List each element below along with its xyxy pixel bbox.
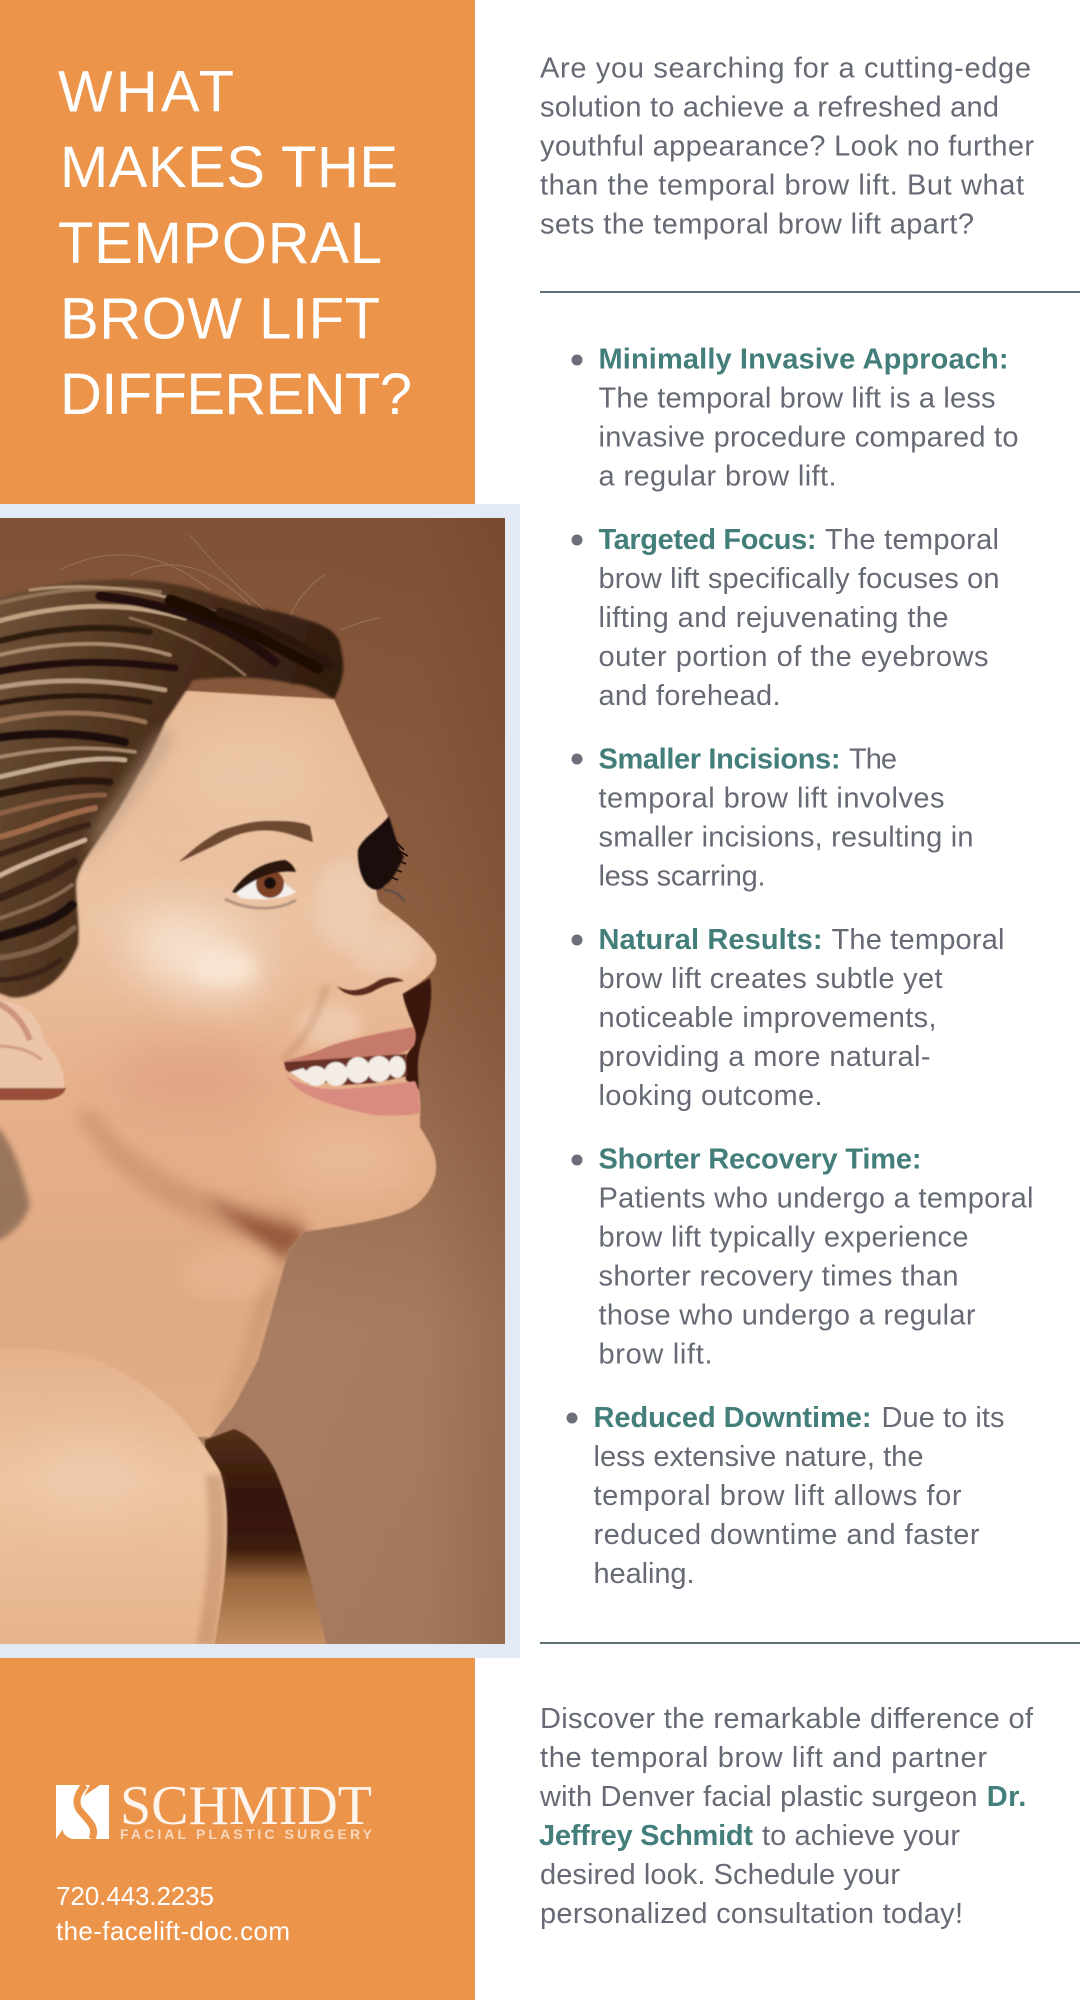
bullet: reduced downtime: temporal brow lift allows for xyxy=(594,1480,962,1512)
bullet: shorter recovery time: shorter recovery times than xyxy=(598,1261,958,1293)
bullet: reduced downtime: healing. xyxy=(594,1558,694,1590)
bullet: minimally invasive approach: a regular brow lift. xyxy=(598,461,836,493)
bullet: shorter recovery time: those who undergo a regular xyxy=(598,1300,976,1332)
panel: footer block xyxy=(0,1658,475,2000)
bullet: minimally invasive approach xyxy=(572,344,1018,493)
contact details xyxy=(56,1881,290,1946)
bullet: minimally invasive approach: Minimally Invasive Approach: xyxy=(598,344,1008,376)
intro paragraph: solution to achieve a refreshed and xyxy=(540,92,999,124)
far cheek shadow xyxy=(403,978,431,1090)
mouth xyxy=(284,1027,420,1116)
bullet: natural results: Natural Results: xyxy=(598,924,822,956)
hair mass xyxy=(0,579,343,998)
closing paragraph xyxy=(539,1703,1034,1930)
title: WHAT xyxy=(58,60,234,124)
bullet: smaller incisions xyxy=(572,744,974,893)
logo: SCHMIDT xyxy=(120,1775,372,1837)
nostril xyxy=(337,977,404,995)
bullet: natural results: looking outcome. xyxy=(598,1080,822,1112)
bullet: shorter recovery time xyxy=(572,1144,1034,1371)
bullet: natural results xyxy=(572,924,1004,1112)
hair streaks xyxy=(0,587,330,980)
bullet: smaller incisions: less scarring. xyxy=(598,861,766,893)
title xyxy=(58,60,412,427)
ear xyxy=(0,1000,66,1100)
bullet: targeted focus: lifting and rejuvenating the xyxy=(598,602,948,634)
flyaway hairs xyxy=(60,535,380,630)
bullet: shorter recovery time: brow lift typically experience xyxy=(598,1222,968,1254)
bullet: reduced downtime: Due to its xyxy=(882,1402,1004,1434)
title: TEMPORAL xyxy=(58,211,382,276)
far eye and lashes xyxy=(358,816,408,902)
bullet: targeted focus xyxy=(572,524,1000,712)
bullet: natural results: noticeable improvements, xyxy=(598,1002,936,1034)
closing paragraph: Dr. xyxy=(987,1781,1026,1813)
intro paragraph: youthful appearance? Look no further xyxy=(540,130,1034,162)
skin shading xyxy=(75,715,420,1430)
bullet: shorter recovery time: brow lift. xyxy=(598,1339,712,1371)
shoulder xyxy=(0,1348,227,1654)
closing paragraph: to achieve your xyxy=(762,1820,960,1852)
back shoulder xyxy=(205,1429,329,1654)
contact details: the-facelift-doc.com xyxy=(56,1916,290,1946)
intro paragraph: than the temporal brow lift. But what xyxy=(540,170,1024,202)
title: DIFFERENT? xyxy=(60,362,412,427)
closing paragraph: Jeffrey Schmidt xyxy=(539,1820,753,1852)
bullet: reduced downtime xyxy=(566,1402,1004,1590)
hair to skin blend xyxy=(85,730,175,865)
panel: title block xyxy=(0,0,475,504)
title: BROW LIFT xyxy=(60,286,380,352)
bullet: smaller incisions: The xyxy=(849,744,897,776)
bullet: minimally invasive approach: invasive procedure compared to xyxy=(598,422,1018,454)
bottom divider xyxy=(540,1642,1080,1644)
closing paragraph: personalized consultation today! xyxy=(540,1898,963,1930)
closing paragraph: desired look. Schedule your xyxy=(540,1859,900,1891)
bullet: reduced downtime: reduced downtime and faster xyxy=(594,1519,980,1551)
top divider xyxy=(540,291,1080,293)
closing paragraph: the temporal brow lift and partner xyxy=(540,1742,987,1774)
bullet: targeted focus: The temporal xyxy=(825,524,999,556)
eyebrow xyxy=(179,821,313,862)
bullet: reduced downtime: less extensive nature, the xyxy=(594,1441,924,1473)
closing paragraph: with Denver facial plastic surgeon xyxy=(539,1781,978,1813)
bullet: smaller incisions: smaller incisions, resulting in xyxy=(598,822,974,854)
bullet: shorter recovery time: Shorter Recovery Time: xyxy=(598,1144,922,1176)
bullet: targeted focus: outer portion of the eyebrows xyxy=(598,641,988,673)
photo: woman in profile xyxy=(0,518,505,1654)
bullet: shorter recovery time: Patients who undergo a temporal xyxy=(598,1183,1034,1215)
intro paragraph: sets the temporal brow lift apart? xyxy=(540,208,974,240)
logo: FACIAL PLASTIC SURGERY xyxy=(120,1826,373,1842)
title: MAKES THE xyxy=(60,135,398,200)
bullet: targeted focus: brow lift specifically focuses on xyxy=(598,563,1000,595)
panel: photo frame xyxy=(0,504,520,1658)
bullet: targeted focus: and forehead. xyxy=(598,680,780,712)
bullet: reduced downtime: Reduced Downtime: xyxy=(594,1402,872,1434)
neck hair xyxy=(0,1122,30,1245)
bullet: natural results: The temporal xyxy=(832,924,1004,956)
intro paragraph: Are you searching for a cutting-edge xyxy=(540,52,1031,84)
face and neck xyxy=(0,680,436,1437)
bullet: natural results: providing a more natural- xyxy=(598,1041,930,1073)
closing paragraph: Discover the remarkable difference of xyxy=(540,1703,1034,1735)
intro paragraph xyxy=(540,52,1034,240)
near eye xyxy=(225,860,296,908)
bullet: natural results: brow lift creates subtle yet xyxy=(598,963,942,995)
bullet: minimally invasive approach: The temporal brow lift is a less xyxy=(598,383,996,415)
bullet: smaller incisions: Smaller Incisions: xyxy=(598,744,840,776)
contact details: 720.443.2235 xyxy=(56,1881,214,1911)
bullet: smaller incisions: temporal brow lift involves xyxy=(598,783,944,815)
bullet: targeted focus: Targeted Focus: xyxy=(598,524,816,556)
